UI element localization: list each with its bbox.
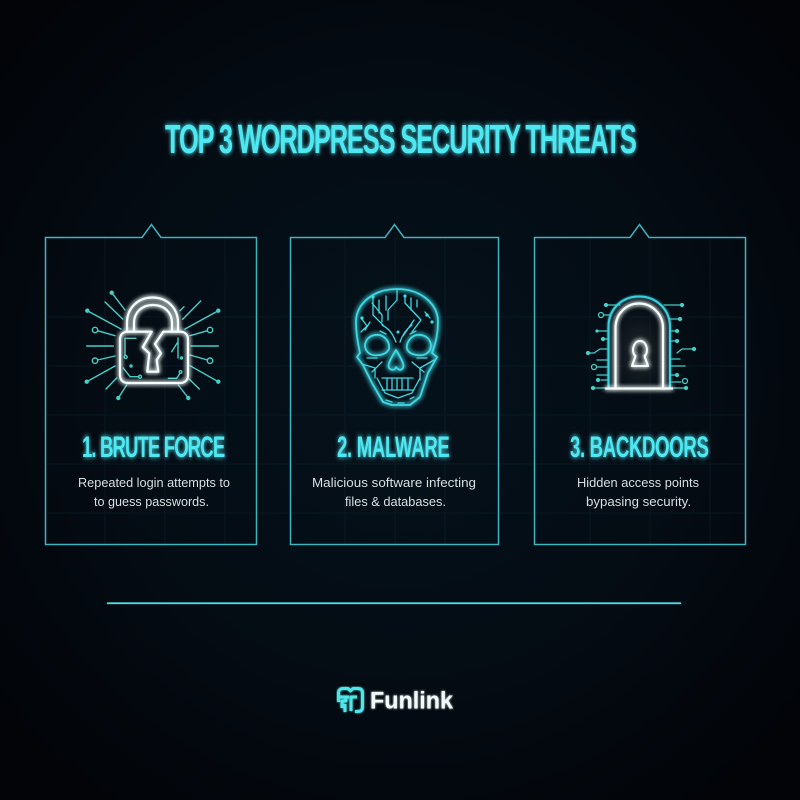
line 2: to guess passwords. <box>94 494 209 509</box>
line 1: Hidden access points <box>577 475 699 490</box>
divider line <box>107 602 681 604</box>
line 2: bypasing security. <box>586 494 691 509</box>
description: malware <box>312 475 476 509</box>
icon: circuit skull <box>356 289 438 405</box>
title: TOP 3 WORDPRESS SECURITY THREATS <box>165 117 637 163</box>
card frame <box>46 224 256 544</box>
icon: arched door with keyhole <box>586 296 696 397</box>
icon: logo mark <box>338 688 362 712</box>
heading: malware: 2. MALWARE <box>337 431 450 464</box>
heading: brute force: 1. BRUTE FORCE <box>82 431 225 464</box>
wordmark: Funlink <box>370 688 454 714</box>
description: brute force <box>78 475 230 509</box>
icon: broken padlock <box>85 291 220 400</box>
line 1: Malicious software infecting <box>312 475 476 490</box>
logo: Funlink <box>338 688 454 714</box>
panel: backdoors <box>534 224 746 544</box>
line 2: files & databases. <box>345 494 446 509</box>
card frame <box>534 224 746 544</box>
card frame <box>290 224 498 544</box>
line 1: Repeated login attempts to <box>78 475 230 490</box>
panel: brute force <box>46 224 256 544</box>
panel: malware <box>290 224 498 544</box>
heading: backdoors: 3. BACKDOORS <box>570 431 709 464</box>
description: backdoors <box>577 475 699 509</box>
